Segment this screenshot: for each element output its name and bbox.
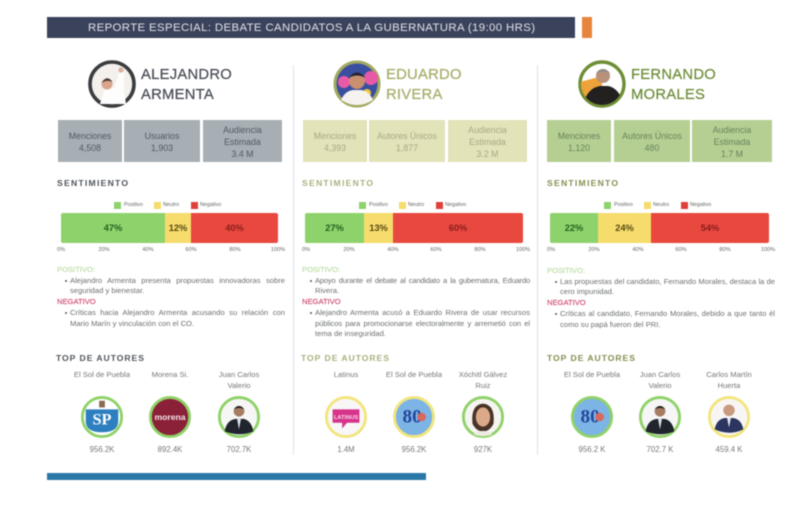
footer bar xyxy=(47,473,426,480)
author: Latinus: 1.4M xyxy=(337,445,355,454)
top authors xyxy=(74,370,261,454)
stat: audiencia: Estimada xyxy=(469,137,506,147)
axis: 60% xyxy=(185,247,197,253)
author: Juan Carlos Valerio xyxy=(638,370,682,454)
heading: top de autores: TOP DE AUTORES xyxy=(547,353,636,363)
author: Xochitl Galvez Ruiz: Ruiz xyxy=(475,381,491,390)
sentiment notes: POSITIVO: xyxy=(547,266,585,275)
heading: top de autores: TOP DE AUTORES xyxy=(301,353,390,363)
author: Latinus: Latinus xyxy=(334,370,358,379)
sentiment bar: 24% xyxy=(615,223,634,233)
sentiment bar: 22% xyxy=(565,223,583,233)
sentiment notes: públicos para promocionarse electoralmente y arremetió con el xyxy=(315,319,530,328)
author: Latinus xyxy=(324,370,368,454)
stat: usuarios xyxy=(124,120,200,162)
stat: usuarios: 1,903 xyxy=(151,143,173,153)
header banner: REPORTE ESPECIAL: DEBATE CANDIDATOS A LA GUBERNATURA (19:00 HRS) xyxy=(88,22,535,34)
author: Morena Si: morena xyxy=(154,412,186,422)
sentiment notes: como su papá fueron del PRI. xyxy=(560,320,660,329)
panel: Fernando Morales xyxy=(546,60,776,454)
stat: audiencia xyxy=(692,120,772,162)
author: El Sol de Puebla xyxy=(386,370,442,454)
sentiment bar xyxy=(304,212,524,244)
chart legend: Positivo xyxy=(614,202,633,208)
author: El Sol de Puebla: 956.2 K xyxy=(579,445,605,454)
stat: autores: Autores Únicos xyxy=(622,131,682,141)
sentiment notes: Mario Marín y vinculación con el CO. xyxy=(70,319,194,328)
sentiment notes: POSITIVO: xyxy=(302,265,340,274)
stat: autores xyxy=(369,120,445,162)
chart legend: Neutro xyxy=(163,202,179,208)
axis xyxy=(302,246,531,253)
stat: audiencia: Estimada xyxy=(714,137,750,147)
author: Juan Carlos Valerio: Juan Carlos xyxy=(640,370,680,379)
header banner xyxy=(47,17,575,38)
candidate name xyxy=(386,67,462,103)
orange accent block xyxy=(582,17,592,38)
author: Juan Carlos Valerio: 702.7K xyxy=(227,445,251,454)
sentiment notes: NEGATIVO xyxy=(547,298,586,307)
sentiment bar: 40% xyxy=(225,223,244,233)
axis: 0% xyxy=(57,247,65,253)
sentiment notes: POSITIVO: xyxy=(57,265,95,274)
sentiment notes: Críticas hacia Alejandro Armenta acusando su relación con xyxy=(70,308,285,317)
sentiment bar: 47% xyxy=(104,223,122,233)
panel: Alejandro Armenta xyxy=(56,60,286,454)
stat boxes xyxy=(546,119,773,163)
author: Carlos Martin Huerta: Huerta xyxy=(718,381,740,390)
chart legend xyxy=(113,201,222,210)
sentiment bar: 12% xyxy=(169,223,187,233)
axis: 60% xyxy=(430,247,442,253)
author: El Sol de Puebla: 80 xyxy=(581,407,600,428)
chart legend: Negativo xyxy=(445,202,466,208)
author: El Sol de Puebla xyxy=(74,370,130,454)
author: El Sol de Puebla: El Sol de Puebla xyxy=(386,370,442,379)
sentiment notes: Alejandro Armenta acusó a Eduardo Rivera de usar recursos xyxy=(315,308,530,317)
sentiment notes: NEGATIVO xyxy=(302,297,341,306)
author: Xochitl Galvez Ruiz xyxy=(458,370,508,454)
stat: audiencia: 3.2 M xyxy=(476,149,498,159)
stat: menciones: 1,120 xyxy=(568,143,590,153)
sentiment notes: Alejandro Armenta presenta propuestas innovadoras sobre xyxy=(70,276,285,285)
stat: menciones: 4,508 xyxy=(79,143,101,153)
axis: 80% xyxy=(719,247,731,253)
axis: 0% xyxy=(302,247,310,253)
top authors xyxy=(324,370,508,454)
axis: 20% xyxy=(588,247,600,253)
stat: audiencia: Estimada xyxy=(224,137,261,147)
author: El Sol de Puebla: El Sol de Puebla xyxy=(74,370,130,379)
stat: menciones: Menciones xyxy=(314,131,356,141)
author: El Sol de Puebla xyxy=(564,370,620,454)
author: Juan Carlos Valerio: Valerio xyxy=(227,381,251,390)
author: El Sol de Puebla: SP xyxy=(93,411,112,429)
stat: menciones xyxy=(58,120,122,162)
author: Juan Carlos Valerio: Valerio xyxy=(648,381,672,390)
author: Carlos Martin Huerta xyxy=(706,370,752,454)
axis: 80% xyxy=(229,247,241,253)
sentiment bar: 27% xyxy=(325,223,344,233)
stat: audiencia: Audiencia xyxy=(223,125,262,135)
panel: Eduardo Rivera xyxy=(300,60,531,454)
axis: 80% xyxy=(474,247,486,253)
candidate name: EDUARDO xyxy=(386,67,462,83)
author: Morena Si xyxy=(148,370,192,454)
candidate name: MORALES xyxy=(631,87,705,103)
author: Morena Si: Morena Si. xyxy=(152,370,188,379)
stat: menciones: Menciones xyxy=(69,131,111,141)
author: Juan Carlos Valerio: 702.7 K xyxy=(647,445,673,454)
candidate name: ALEJANDRO xyxy=(141,67,232,83)
chart legend: Neutro xyxy=(408,202,424,208)
author: Carlos Martin Huerta: Carlos Martín xyxy=(706,370,752,379)
heading: sentimiento: SENTIMIENTO xyxy=(302,178,374,188)
stat boxes xyxy=(302,120,528,162)
axis: 0% xyxy=(547,247,555,253)
axis: 100% xyxy=(271,247,285,253)
sentiment notes xyxy=(546,266,776,329)
author: El Sol de Puebla: 956.2K xyxy=(402,445,426,454)
author: Carlos Martin Huerta: 459.4 K xyxy=(716,445,742,454)
stat: audiencia xyxy=(448,120,527,162)
axis: 20% xyxy=(343,247,355,253)
sentiment notes: NEGATIVO xyxy=(57,297,96,306)
axis: 100% xyxy=(761,247,775,253)
stat: audiencia: 1.7 M xyxy=(721,149,743,159)
chart legend xyxy=(603,201,712,210)
author: El Sol de Puebla: El Sol de Puebla xyxy=(564,370,620,379)
icon: Fernando Morales portrait xyxy=(578,60,626,108)
axis: 40% xyxy=(387,247,399,253)
chart legend: Neutro xyxy=(653,202,669,208)
stat: autores: 1,877 xyxy=(396,143,418,153)
stat: audiencia: Audiencia xyxy=(468,125,507,135)
axis xyxy=(56,246,286,253)
sentiment notes xyxy=(56,265,286,328)
top authors xyxy=(564,370,752,454)
sentiment bar xyxy=(549,212,770,244)
author: El Sol de Puebla: 80 xyxy=(403,407,422,428)
candidate name: RIVERA xyxy=(386,87,443,103)
author: Morena Si: 892.4K xyxy=(158,445,182,454)
sentiment notes: tema de inseguridad. xyxy=(315,329,386,338)
stat: menciones xyxy=(547,120,611,162)
axis: 40% xyxy=(142,247,154,253)
chart legend: Negativo xyxy=(200,202,221,208)
stat: menciones: Menciones xyxy=(558,131,600,141)
sentiment notes: Críticas al candidato, Fernando Morales, debido a que tanto él xyxy=(560,309,775,318)
candidate name xyxy=(631,67,716,103)
sentiment notes: Apoyo durante el debate al candidato a la gubernatura, Eduardo xyxy=(315,276,530,285)
sentiment notes: Las propuestas del candidato, Fernando Morales, destaca la de xyxy=(560,277,775,286)
heading: sentimiento: SENTIMIENTO xyxy=(547,178,619,188)
heading: sentimiento: SENTIMIENTO xyxy=(57,178,129,188)
heading: top de autores: TOP DE AUTORES xyxy=(56,353,145,363)
sentiment notes: Rivera. xyxy=(315,286,339,295)
icon: Alejandro Armenta portrait xyxy=(87,60,137,109)
stat: menciones: 4,393 xyxy=(324,143,346,153)
icon: Eduardo Rivera portrait xyxy=(332,60,382,108)
author: El Sol de Puebla: 956.2K xyxy=(90,445,114,454)
axis: 60% xyxy=(675,247,687,253)
chart legend: Positivo xyxy=(124,202,143,208)
sentiment notes: cero impunidad. xyxy=(560,287,614,296)
stat boxes xyxy=(58,120,282,162)
sentiment bar: 60% xyxy=(449,223,467,233)
stat: audiencia: Audiencia xyxy=(713,125,751,135)
stat: usuarios: Usuarios xyxy=(145,131,179,141)
candidate name xyxy=(140,67,232,103)
author: Xochitl Galvez Ruiz: Xóchitl Gálvez xyxy=(459,370,507,379)
stat: audiencia: 3.4 M xyxy=(231,149,254,159)
axis: 100% xyxy=(516,247,530,253)
sentiment notes: seguridad y bienestar. xyxy=(70,286,144,295)
axis xyxy=(546,246,776,253)
candidate name: ARMENTA xyxy=(141,87,214,103)
author: Juan Carlos Valerio xyxy=(217,370,261,454)
stat: audiencia xyxy=(203,120,282,162)
sentiment notes xyxy=(302,265,530,338)
stat: autores: Autores Únicos xyxy=(377,131,437,141)
chart legend: Negativo xyxy=(690,202,711,208)
sentiment bar: 54% xyxy=(701,223,719,233)
axis: 20% xyxy=(98,247,110,253)
stat: autores: 480 xyxy=(645,143,659,153)
sentiment bar: 13% xyxy=(369,223,388,233)
sentiment bar xyxy=(60,212,279,244)
candidate name: FERNANDO xyxy=(631,67,716,83)
stat: menciones xyxy=(303,120,367,162)
chart legend xyxy=(358,201,467,210)
author: Juan Carlos Valerio: Juan Carlos xyxy=(219,370,259,379)
axis: 40% xyxy=(632,247,644,253)
author: Latinus: LATINUS xyxy=(334,415,358,421)
stat: autores xyxy=(614,120,690,162)
chart legend: Positivo xyxy=(369,202,388,208)
author: Xochitl Galvez Ruiz: 927K xyxy=(474,445,492,454)
